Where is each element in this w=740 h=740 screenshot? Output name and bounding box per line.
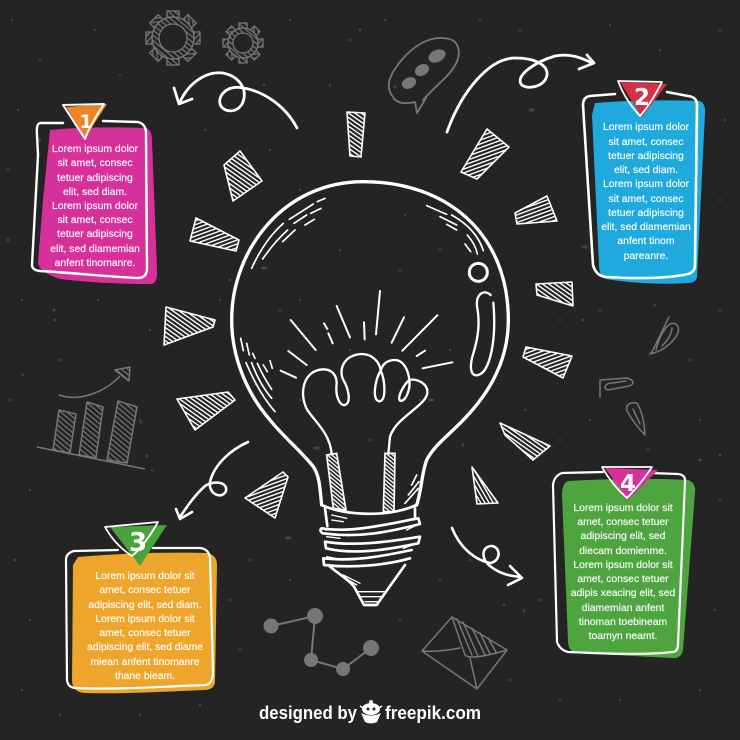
panel 3: orange <box>66 522 217 693</box>
panel 4 text: tinoman toebineam <box>579 617 667 628</box>
panel 2 text: Lorem ipsum dolor <box>603 179 690 190</box>
panel 1 text: Lorem ipsum dolor <box>52 144 139 155</box>
bar chart sketch <box>37 367 145 469</box>
icon: gears <box>146 11 263 65</box>
panel 1 text <box>50 144 140 269</box>
panel 3 sketch outline <box>66 548 213 689</box>
panel 4: green <box>553 467 695 658</box>
panel 3 text <box>87 571 203 682</box>
panel 1 number badge: 1 <box>79 111 93 133</box>
arrow: lower left <box>176 442 248 519</box>
panel 2 text: Lorem ipsum dolor <box>603 122 690 133</box>
panel 4 text: adipis xeacing elit, sed <box>571 588 675 599</box>
panel 3 text: miean anfent tinomanre <box>90 657 200 668</box>
reflection ring <box>469 263 487 281</box>
panel 1 number badge <box>63 104 107 139</box>
panel 1 text: elit, sed diamemian <box>50 244 140 255</box>
panel 2 text: sit amet, consec <box>608 137 684 148</box>
panel 3 number badge: 3 <box>129 528 147 558</box>
panel 3 number badge <box>105 522 167 566</box>
panel 2 text: elit, sed diam. <box>614 165 678 176</box>
filament <box>303 354 427 454</box>
panel 4 text: amet, consec tetuer <box>577 574 669 585</box>
panel 1: pink <box>32 104 157 284</box>
panel 4 text: toamyn neamt. <box>589 631 657 642</box>
panel 2 text: elit, sed diamemian <box>601 222 691 233</box>
panel 3 background <box>72 553 217 693</box>
hatched rays around bulb <box>164 112 573 518</box>
icon: freepik logo <box>360 700 382 724</box>
panel 3 text: Lorem ipsum dolor sit <box>95 571 195 582</box>
panel 4 text: diecam domienme. <box>579 546 667 557</box>
panel 4 number badge: 4 <box>620 471 636 497</box>
panel 4 background <box>562 479 695 658</box>
panel 4 text: adipiscing elit, sed <box>581 531 666 542</box>
panel 2 number badge: 2 <box>634 85 650 111</box>
panel 2 sketch outline <box>583 92 697 278</box>
panel 3 text: adipiscing elit, sed diam. <box>88 600 202 611</box>
panel 3 text: amet, consec tetuer <box>99 585 191 596</box>
panel 1 text: sit amet, consec <box>57 158 133 169</box>
panel 1 text: elit, sed diam. <box>63 187 127 198</box>
panel 1 sketch outline <box>32 121 147 278</box>
panel 2 text: pareanre. <box>624 251 668 262</box>
panel 4 text <box>571 503 675 642</box>
filament supports <box>327 453 395 512</box>
panel 3 text: amet, consec tetuer <box>99 628 191 639</box>
reflection capsule <box>471 292 494 375</box>
panel 4 sketch outline <box>553 472 685 654</box>
panel 1 text: sit amet, consec <box>57 215 133 226</box>
panel 2 text <box>601 122 691 262</box>
panel 4 text: Lorem ipsum dolor sit <box>573 560 673 571</box>
panel 4 text: diamemian anfent <box>582 603 664 614</box>
icon: speech bubble <box>389 38 459 113</box>
panel 3 text: thane bieam. <box>115 671 175 682</box>
freepik.com: freepik.com <box>385 703 481 723</box>
panel 1 text: Lorem ipsum dolor <box>52 201 139 212</box>
panel 3 text: adipiscing elit, sed diame <box>87 642 203 653</box>
panel 4 number badge <box>602 467 658 500</box>
panel 2 background <box>592 100 705 284</box>
panel 2 text: anfent tinom <box>617 236 675 247</box>
screw base <box>321 505 420 605</box>
icon: envelope <box>422 617 507 689</box>
panel 2 text: sit amet, consec <box>608 194 684 205</box>
panel 3 text: Lorem ipsum dolor sit <box>95 614 195 625</box>
designed by: designed by <box>259 703 357 723</box>
panel 1 text: anfent tinomanre. <box>55 258 135 269</box>
icon: molecule network <box>264 608 379 676</box>
panel 4 text: Lorem ipsum dolor sit <box>573 503 673 514</box>
panel 4 text: amet, consec tetuer <box>577 517 669 528</box>
light rays <box>281 291 452 378</box>
icon: paper clips <box>600 317 678 435</box>
glass highlights <box>241 198 483 503</box>
light bulb <box>232 182 508 605</box>
arrow: lower right <box>452 528 522 585</box>
panel 1 text: tetuer adipiscing <box>57 173 133 184</box>
panel 2 text: tetuer adipiscing <box>608 208 684 219</box>
panel 2 number badge <box>618 81 667 117</box>
panel 2 text: tetuer adipiscing <box>608 151 684 162</box>
bulb glass outline <box>232 182 508 505</box>
panel 1 background <box>38 127 157 284</box>
arrow: top right <box>447 55 594 132</box>
panel 1 text: tetuer adipiscing <box>57 229 133 240</box>
footer credit <box>259 700 481 724</box>
panel 2: blue <box>583 81 705 284</box>
arrow: top left <box>174 73 297 128</box>
